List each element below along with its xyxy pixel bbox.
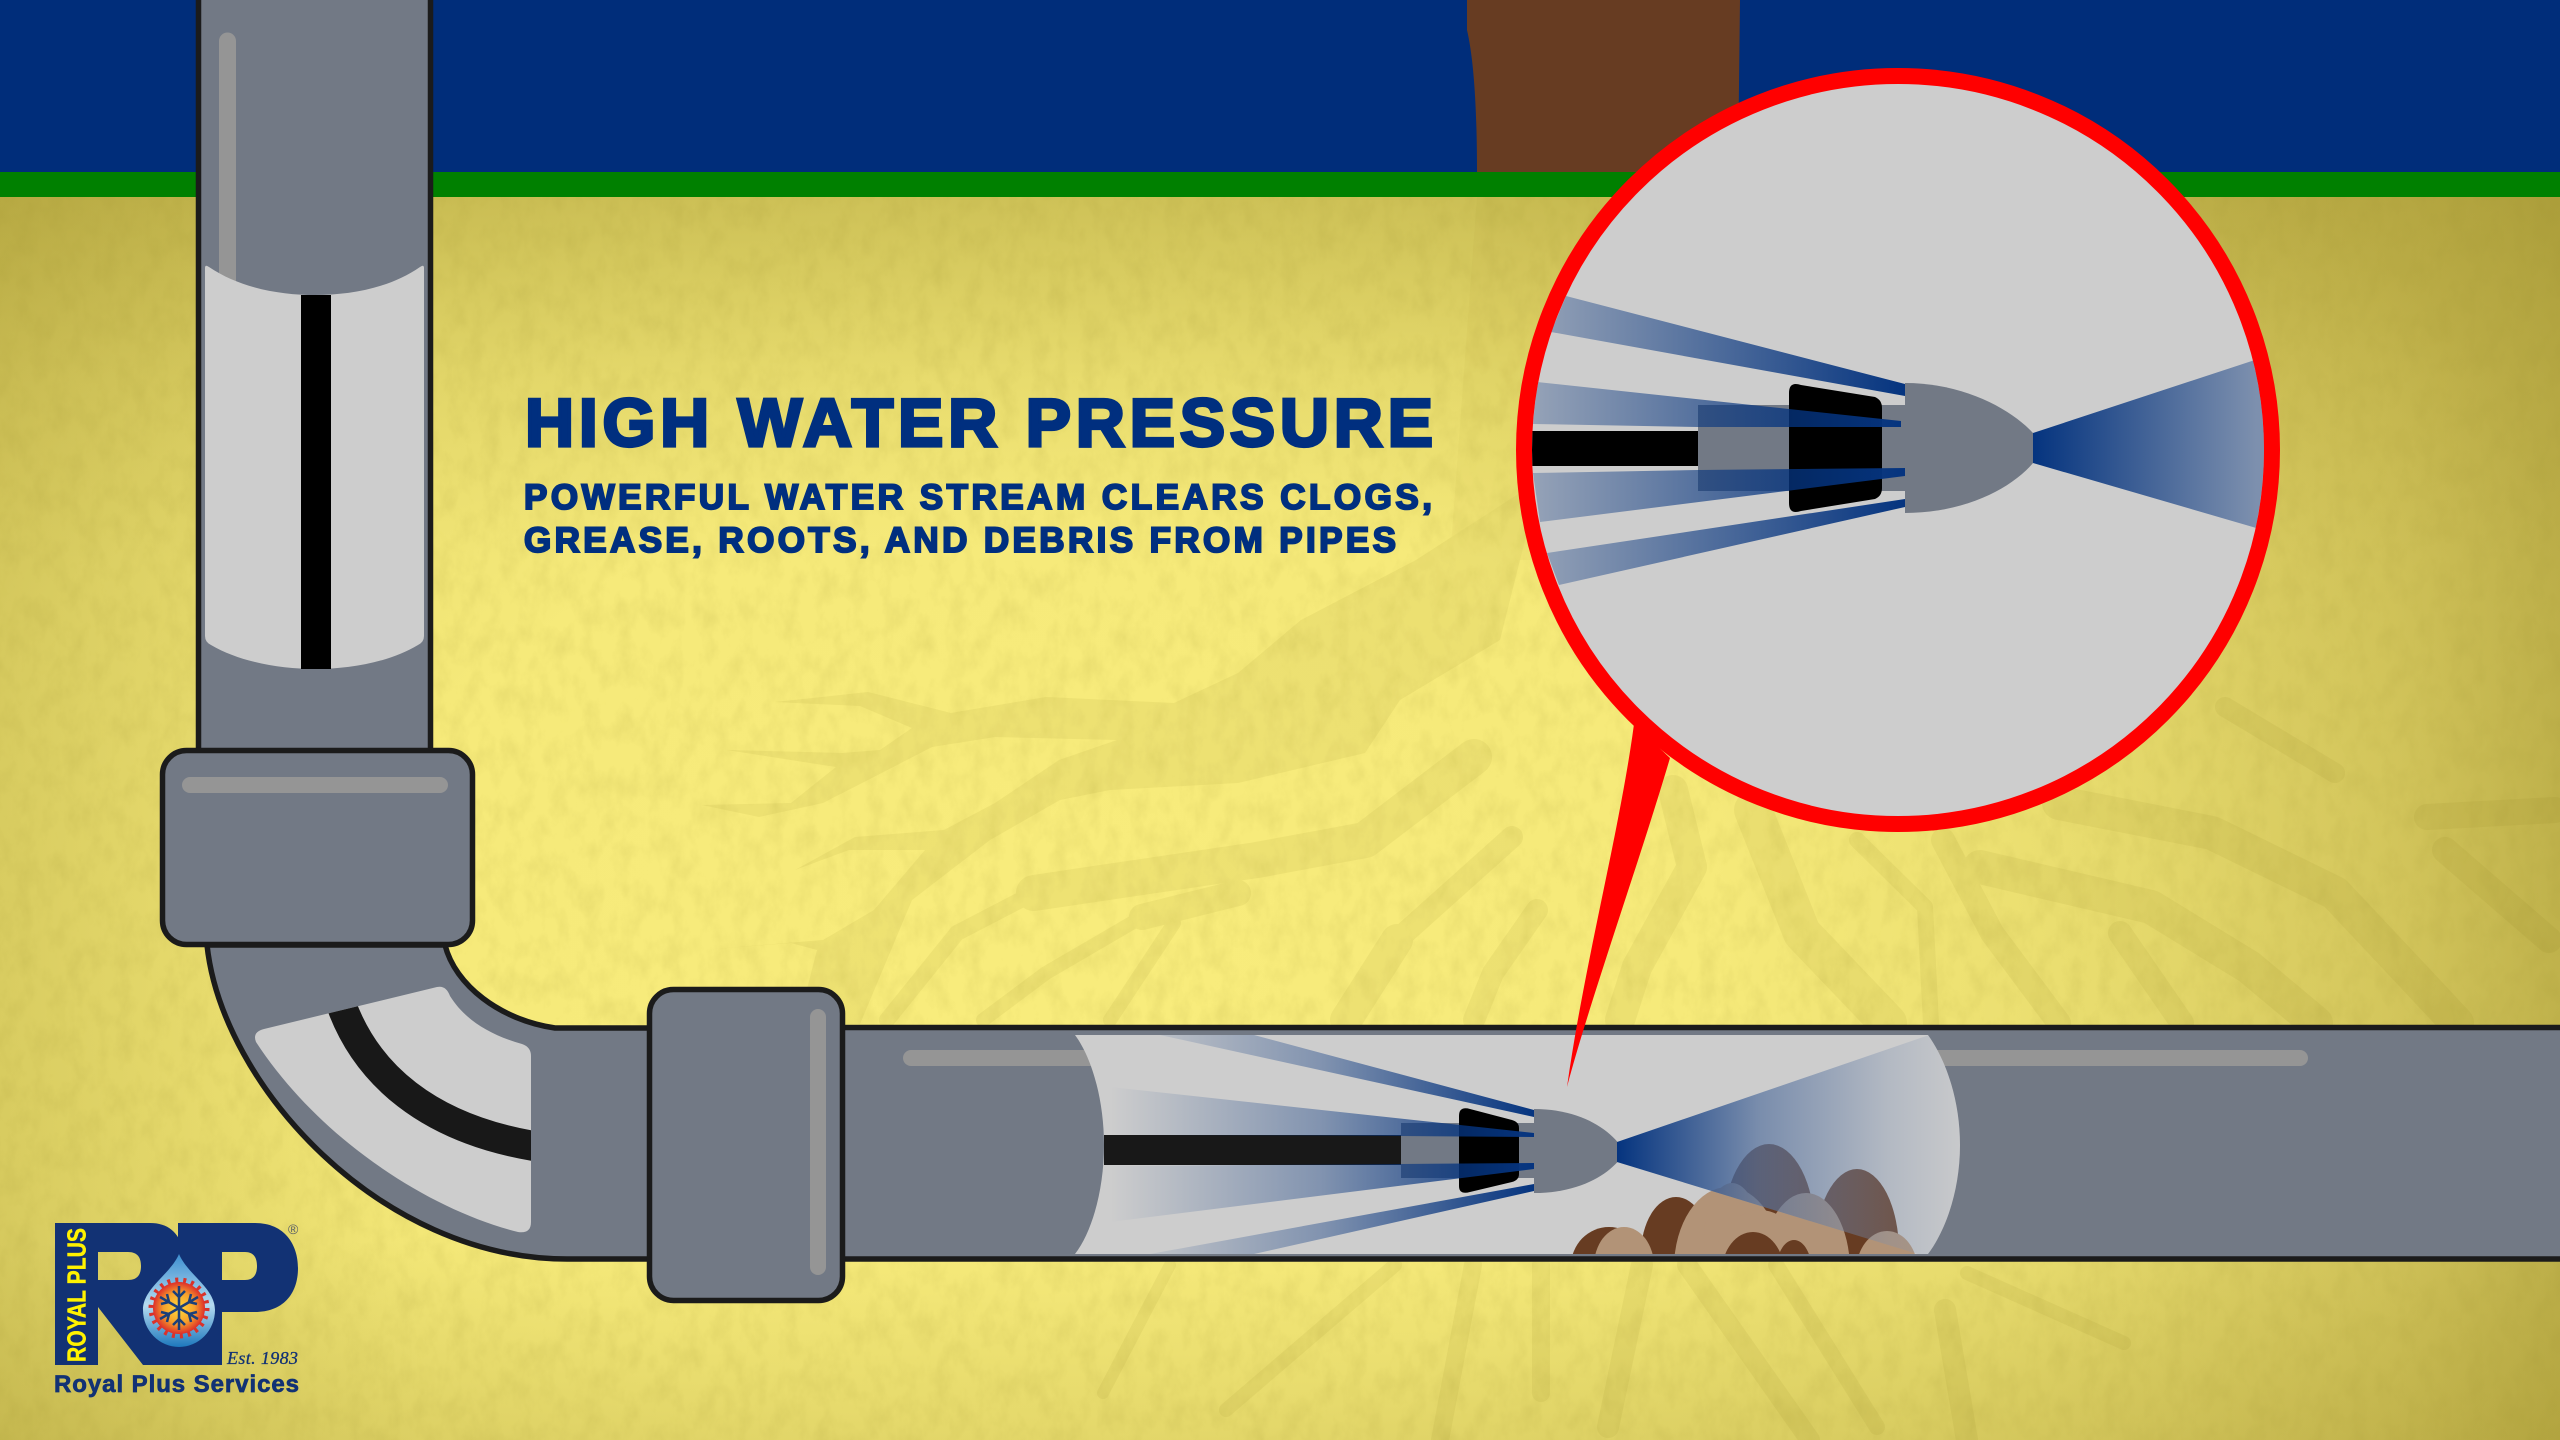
logo letter P	[178, 1223, 298, 1365]
established date: Est. 1983	[226, 1348, 298, 1368]
enlarged neck	[1698, 405, 1908, 491]
pipe cut-away window	[1075, 1035, 1960, 1254]
enlarged cable	[1530, 431, 1699, 466]
logo letter R	[55, 1223, 184, 1365]
ghost tree roots	[702, 197, 2555, 1440]
pipe cut-away window	[205, 266, 424, 669]
logo sun	[151, 1280, 207, 1336]
elbow cut-away window	[255, 987, 531, 1232]
nozzle collar	[1459, 1108, 1519, 1193]
logo snowflake	[160, 1286, 198, 1330]
water jets backward	[1110, 1035, 1534, 1254]
tree trunk	[1467, 0, 1740, 172]
elbow drain cable	[338, 995, 540, 1147]
logo: Royal Plus Services	[54, 1221, 299, 1398]
pipe highlight	[219, 32, 236, 300]
subheading: GREASE, ROOTS, AND DEBRIS FROM PIPES	[524, 521, 1396, 560]
enlarged nozzle head	[1905, 383, 2033, 513]
enlarged nozzle	[1530, 296, 2270, 585]
water jet veil over debris	[1712, 1144, 1914, 1253]
coupling top	[162, 750, 472, 944]
callout pointer	[1567, 724, 1670, 1087]
cleaning nozzle in pipe	[1104, 1035, 1948, 1254]
drain cable	[301, 295, 331, 669]
magnifier lens	[1524, 76, 2272, 824]
subheading	[524, 478, 1432, 560]
vertical pipe	[198, 0, 430, 760]
grass strip	[0, 172, 2560, 197]
coupling right	[650, 990, 842, 1300]
magnifier callout	[1524, 76, 2272, 1087]
enlarged forward jet	[2033, 355, 2270, 532]
horizontal pipe	[650, 1028, 2560, 1259]
water jet forward	[1617, 1036, 1948, 1254]
subheading: POWERFUL WATER STREAM CLEARS CLOGS,	[524, 478, 1432, 517]
heading: HIGH WATER PRESSURE	[525, 385, 1433, 461]
logo vertical text: ROYAL PLUS	[62, 1228, 92, 1362]
enlarged backward jets	[1533, 296, 1905, 585]
cable	[1104, 1135, 1401, 1165]
nozzle neck	[1401, 1123, 1541, 1178]
debris clog	[1572, 1144, 1915, 1254]
nozzle head	[1534, 1109, 1618, 1193]
coupling highlight	[182, 777, 448, 793]
coupling highlight	[810, 1009, 826, 1275]
registered mark: ®	[288, 1221, 299, 1237]
company name: Royal Plus Services	[54, 1371, 299, 1398]
elbow pipe	[207, 945, 660, 1259]
logo droplet	[143, 1254, 215, 1347]
enlarged collar	[1789, 384, 1882, 512]
sky	[0, 0, 2560, 172]
pipe highlight	[903, 1050, 2308, 1066]
